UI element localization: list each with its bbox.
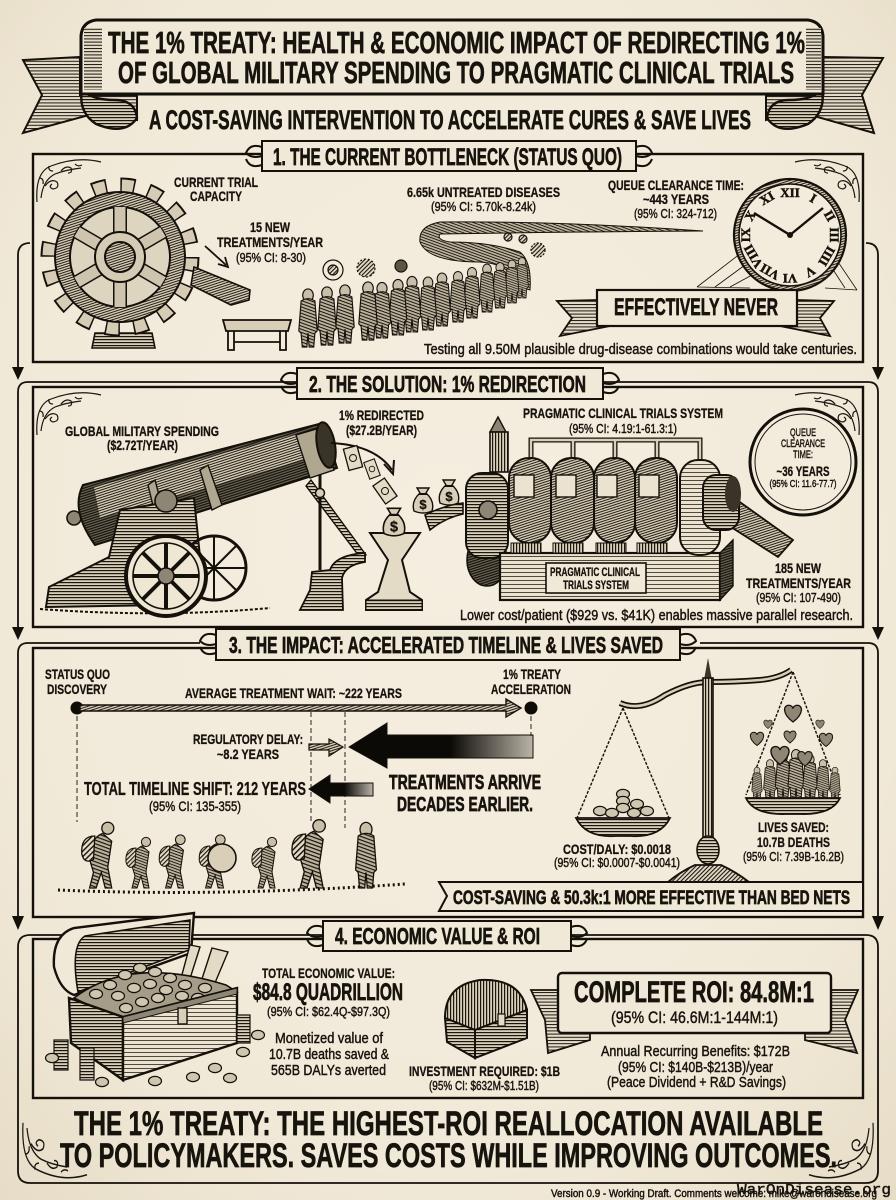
label: regulatory delay: ~8.2 YEARS [217, 746, 279, 762]
icon: reduced-time clock: TIME: [793, 449, 813, 461]
timeline arrow [70, 699, 538, 717]
outer frame: section 4 [18, 935, 878, 1183]
label: treaty acceleration: 1% TREATY [503, 666, 561, 682]
icon: cobwebbed clock: II [821, 208, 839, 224]
label: queue clearance: (95% CI: 324-712) [634, 206, 717, 221]
label: military spending: ($2.72T/YEAR) [107, 437, 178, 453]
label: untreated diseases: (95% CI: 5.70k-8.24k) [431, 199, 536, 214]
label: new treatments: (95% CI: 107-490) [756, 590, 841, 605]
label: total shift [84, 779, 306, 814]
icon: small chest [445, 980, 527, 1058]
icon: cobwebbed clock: XII [780, 185, 800, 200]
big acceleration arrow [349, 723, 533, 768]
icon: balance scale [576, 658, 840, 882]
panel: 3 the impact [33, 629, 863, 917]
ribbon: effectively never: EFFECTIVELY NEVER [614, 294, 778, 321]
corner ornament right [795, 393, 859, 435]
flow arrow: section 3 right [700, 643, 884, 930]
icon: cobwebbed clock: VIII [740, 242, 766, 271]
icon: patient queue [299, 222, 703, 347]
ribbon right hatch [806, 28, 821, 90]
panel: 4 economic value [33, 913, 863, 1098]
arrow: money flow [331, 443, 394, 474]
icon: lever and funnel [300, 475, 422, 610]
panel frame [33, 648, 863, 917]
label: investment [409, 1063, 560, 1093]
banner: bed nets [439, 882, 863, 911]
section heading [246, 141, 652, 171]
label: new treatments [746, 560, 851, 605]
label: average wait: AVERAGE TREATMENT WAIT: ~222 YEARS [185, 685, 402, 701]
panel: 1 current bottleneck [33, 141, 863, 362]
icon: cobwebbed clock: III [827, 227, 842, 243]
label: lives saved [743, 819, 844, 864]
label: total economic value: TOTAL ECONOMIC VALUE: [262, 965, 395, 981]
label: redirected: ($27.2B/YEAR) [346, 422, 417, 438]
regulatory arrow [309, 739, 343, 756]
note: monetized value: 10.7B deaths saved & [269, 1046, 389, 1063]
label: new treatments: TREATMENTS/YEAR [746, 575, 851, 591]
section heading [200, 629, 696, 660]
icon: chute [191, 267, 250, 305]
flow arrow: right, section 1 to 2 [866, 243, 884, 380]
label: queue clearance [608, 177, 744, 221]
ribbon right curl [767, 90, 823, 129]
label: total shift: (95% CI: 135-355) [149, 798, 241, 814]
icons: money bags on spout [413, 480, 463, 530]
icon: reduced-time clock: ~36 YEARS [776, 463, 830, 479]
label: investment: INVESTMENT REQUIRED: $1B [409, 1063, 560, 1079]
ribbon left curl [81, 90, 137, 129]
section heading [281, 368, 619, 399]
icon: cobwebbed clock: X [741, 207, 759, 224]
label: military spending [65, 423, 219, 453]
corner ornament left [37, 160, 101, 202]
icon: walking patients [58, 820, 405, 892]
label: trials system: (95% CI: 4.19:1-61.3:1) [569, 421, 677, 436]
watermark: WarOnDisease.org [737, 1182, 891, 1199]
section heading: 1. THE CURRENT BOTTLENECK (STATUS QUO) [273, 144, 622, 171]
note: monetized value: Monetized value of [275, 1030, 384, 1047]
icon: output tray [223, 320, 291, 350]
label: untreated diseases [407, 184, 560, 214]
icon: cannon [40, 421, 339, 616]
icons: disease germs [323, 233, 545, 280]
label: status quo: STATUS QUO [45, 666, 110, 682]
label: trials system: PRAGMATIC CLINICAL TRIALS SYSTEM [523, 405, 723, 421]
label: lives saved: 10.7B DEATHS [757, 834, 830, 850]
ribbon: complete roi [531, 973, 858, 1053]
note: annual benefits [601, 1043, 790, 1091]
note: monetized value: 565B DALYs averted [271, 1062, 386, 1079]
note: annual benefits: (Peace Dividend + R&D Savings) [607, 1074, 786, 1091]
label: total economic value [253, 965, 403, 1019]
flow arrow: section 3 left [12, 643, 200, 930]
label: new treatments: (95% CI: 8-30) [236, 250, 306, 265]
icons: falling bills [343, 446, 397, 504]
icon: cobwebbed clock: V [802, 263, 818, 281]
section heading: 4. ECONOMIC VALUE & ROI [335, 923, 540, 949]
label: status quo: DISCOVERY [47, 681, 107, 697]
label: trial capacity: CURRENT TRIAL [174, 174, 258, 190]
note: monetized value [269, 1030, 389, 1079]
note: annual benefits: (95% CI: $140B-$213B)/year [618, 1059, 773, 1076]
callout: decades earlier: TREATMENTS ARRIVE [389, 772, 541, 794]
conclusion statement [60, 1105, 837, 1175]
ribbon left tail [23, 57, 137, 133]
icon: cobwebbed clock: IX [738, 227, 753, 242]
icon: cobwebbed clock [697, 179, 857, 291]
label: total economic value: $84.8 QUADRILLION [253, 979, 403, 1006]
corner ornament left [37, 393, 101, 435]
icon: cobwebbed clock: I [807, 190, 819, 206]
section heading [307, 921, 587, 951]
icon: clinical trials machine: PRAGMATIC CLINICAL [550, 565, 640, 579]
ribbon: effectively never [557, 290, 834, 336]
label: lives saved: LIVES SAVED: [758, 819, 829, 835]
icon: gear machine [49, 186, 191, 348]
label: total economic value: (95% CI: $62.4Q-$97.3Q) [267, 1004, 390, 1019]
label: queue clearance: ~443 YEARS [643, 191, 709, 207]
label: regulatory delay [193, 731, 303, 762]
label: redirected: 1% REDIRECTED [339, 407, 424, 423]
flow arrow: section 2 right [603, 382, 884, 640]
timeline drop lines [77, 712, 531, 828]
label: treaty acceleration [491, 666, 571, 697]
label: trials system [523, 405, 723, 436]
label: new treatments: 185 NEW [775, 560, 822, 576]
icon: treasure chest [46, 913, 264, 1087]
label: status quo [45, 666, 110, 697]
corner ornament bottom-right [809, 1123, 873, 1178]
ribbon left hatch [84, 28, 102, 90]
callout: decades earlier [389, 772, 541, 816]
icon: cobwebbed clock: VI [783, 271, 797, 286]
arrow: treatments to chute [205, 246, 228, 267]
label: regulatory delay: REGULATORY DELAY: [193, 731, 303, 747]
label: cost per daly: COST/DALY: $0.0018 [563, 841, 671, 857]
label: queue clearance: QUEUE CLEARANCE TIME: [608, 177, 744, 193]
label: untreated diseases: 6.65k UNTREATED DISEASES [407, 184, 560, 200]
icon: cobwebbed clock: XI [757, 188, 777, 208]
label: cost per daly [554, 841, 680, 870]
main title text [108, 25, 805, 90]
label: trial capacity: CAPACITY [190, 188, 242, 204]
label: new treatments [217, 219, 323, 265]
note: annual benefits: Annual Recurring Benefits: $172B [601, 1043, 790, 1060]
label: treaty acceleration: ACCELERATION [491, 681, 571, 697]
ribbon right tail [766, 57, 883, 133]
icon: reduced-time clock: CLEARANCE [781, 438, 825, 450]
label: total shift: TOTAL TIMELINE SHIFT: 212 YEARS [84, 779, 306, 799]
label: cost per daly: (95% CI: $0.0007-$0.0041) [554, 855, 680, 870]
panel: 2 the solution [33, 368, 863, 627]
panel frame [33, 387, 863, 627]
icon: reduced-time clock: (95% CI: 11.6-77.7) [770, 479, 836, 490]
section heading: 2. THE SOLUTION: 1% REDIRECTION [309, 371, 586, 397]
label: new treatments: TREATMENTS/YEAR [217, 234, 323, 250]
icon: clinical trials machine: TRIALS SYSTEM [563, 578, 629, 592]
flow arrow: left, section 1 to 2 [12, 243, 30, 380]
corner ornament right [795, 160, 859, 202]
ribbon: complete roi: (95% CI: 46.6M:1-144M:1) [611, 1008, 778, 1027]
section heading: 3. THE IMPACT: ACCELERATED TIMELINE & LIVES SAVED [229, 632, 663, 658]
panel frame [33, 154, 863, 362]
icon: cobwebbed clock: VII [758, 261, 782, 283]
label: new treatments: 15 NEW [250, 219, 291, 235]
icon: reduced-time clock [750, 409, 856, 515]
shift arrow [309, 775, 373, 803]
icon: reduced-time clock: QUEUE [790, 427, 816, 439]
label: trial capacity [174, 174, 258, 204]
callout: decades earlier: DECADES EARLIER. [397, 794, 533, 816]
icon: clinical trials machine [466, 417, 793, 600]
label: military spending: GLOBAL MILITARY SPENDING [65, 423, 219, 439]
panel frame [33, 939, 863, 1098]
title ribbon [23, 20, 883, 133]
icon: cobwebbed clock: IIII [815, 244, 838, 269]
flow arrow: section 2 left [12, 382, 297, 640]
label: lives saved: (95% CI: 7.39B-16.2B) [743, 849, 844, 864]
label: redirected [339, 407, 424, 438]
corner ornament bottom-left [23, 1123, 87, 1178]
label: investment: (95% CI: $632M-$1.51B) [429, 1078, 539, 1093]
ribbon main body [81, 20, 823, 94]
